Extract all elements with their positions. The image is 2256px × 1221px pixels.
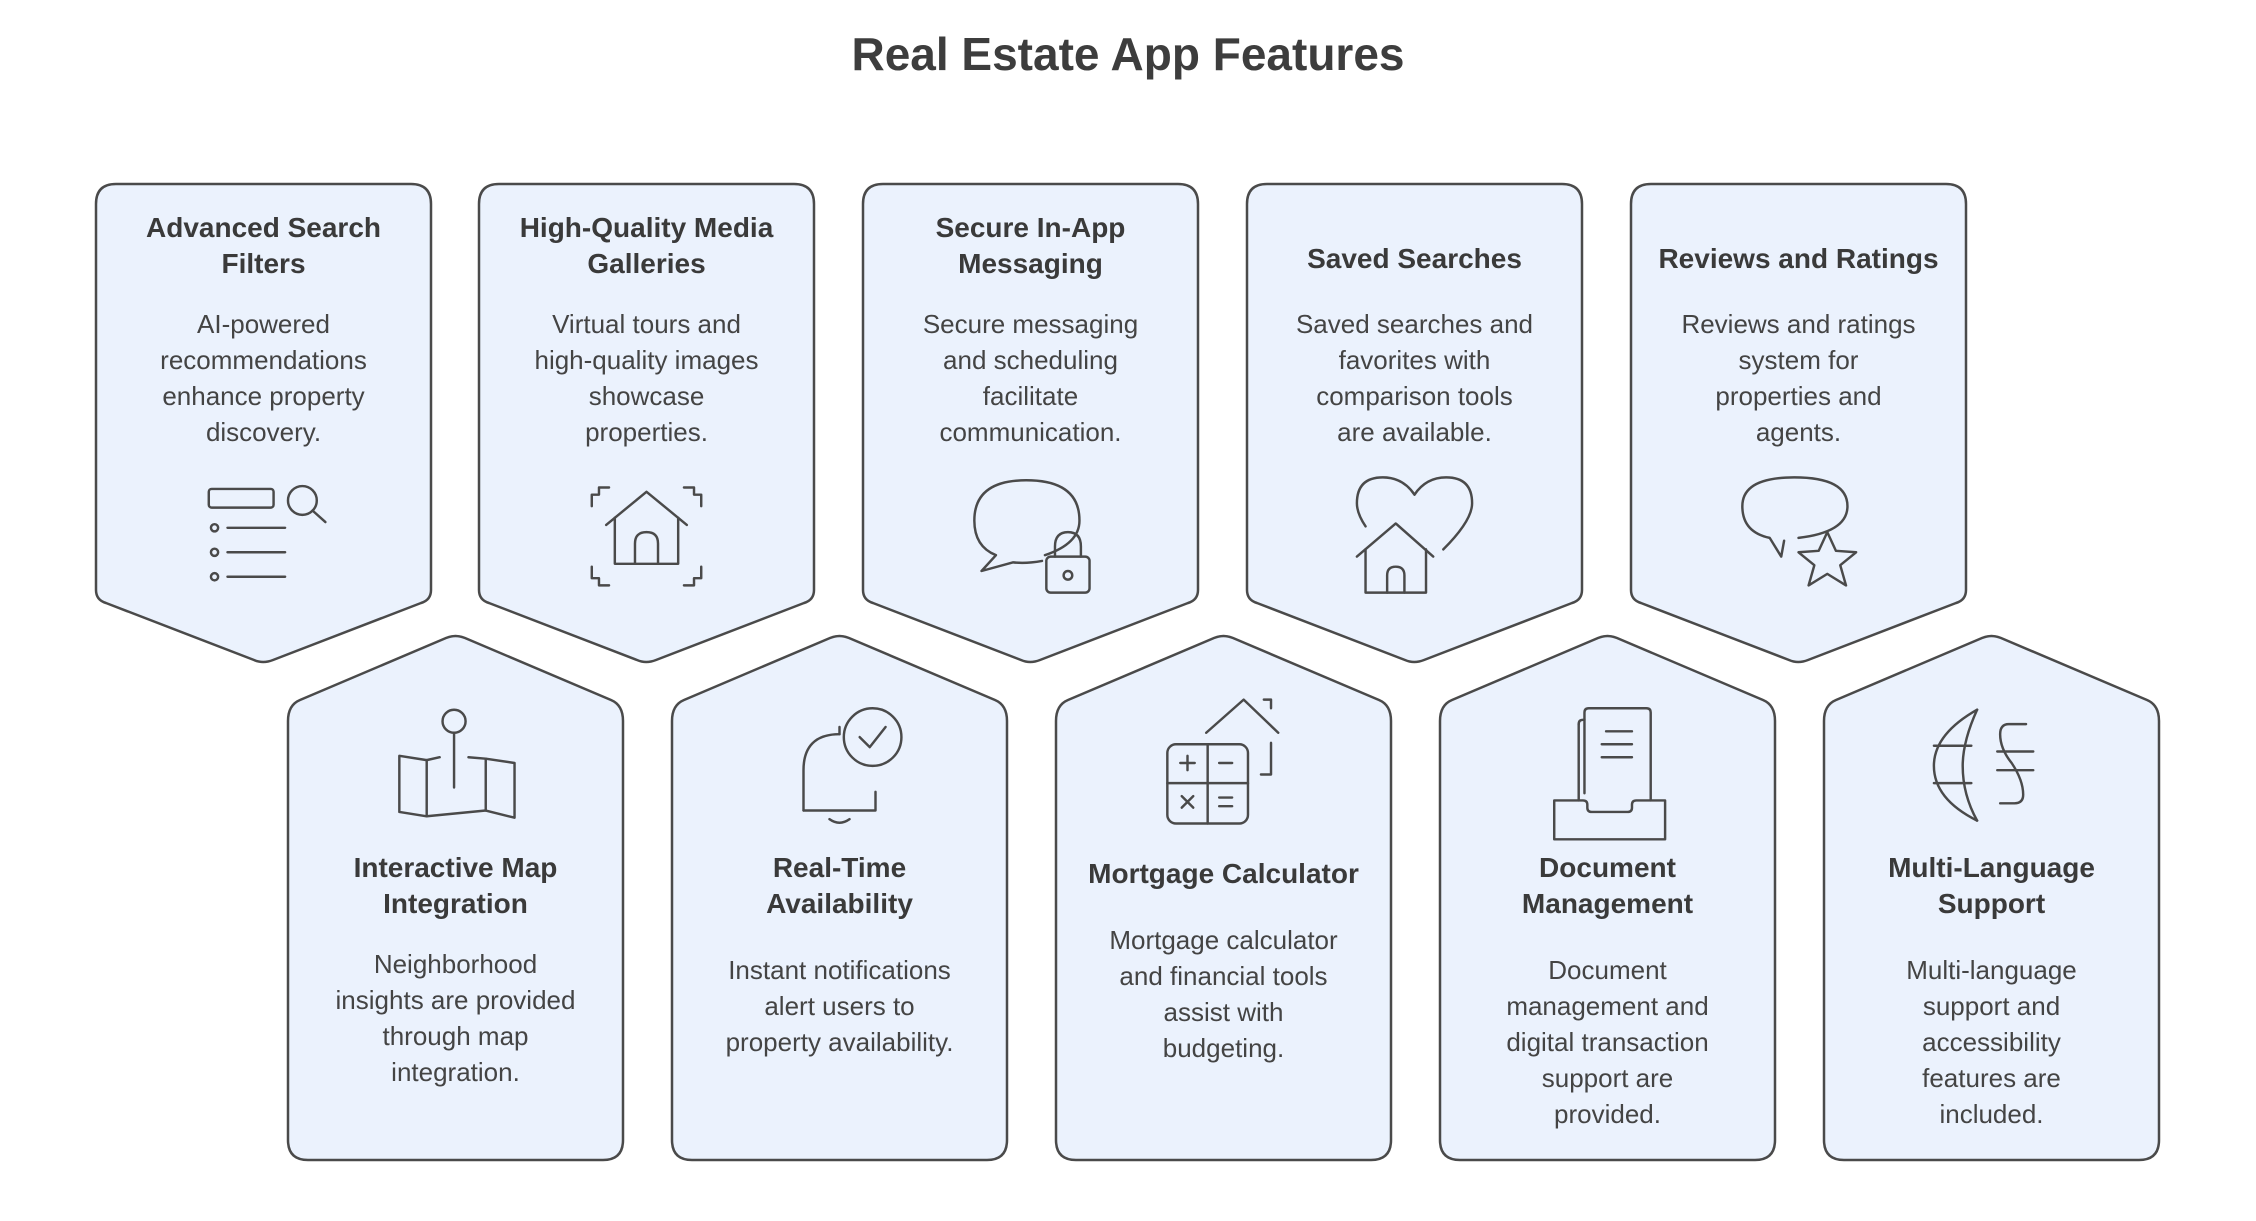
icon: language globe [1934,710,2033,821]
panel: Multi-Language Support: Support [1938,888,2045,919]
panel: Document Management: support are [1542,1063,1673,1093]
panel: Advanced Search Filters: recommendations [160,345,367,375]
panel: Secure In-App Messaging: facilitate [983,381,1078,411]
panel: Real-Time Availability: alert users to [764,991,915,1021]
panel: Secure In-App Messaging [863,184,1198,662]
panel: Mortgage Calculator: assist with [1164,997,1283,1027]
panel: Saved Searches: are available. [1337,417,1492,447]
panel: Advanced Search Filters: enhance property [162,381,365,411]
panel: Document Management: management and [1506,991,1709,1021]
panel: Reviews and Ratings: properties and [1715,381,1882,411]
panel: Saved Searches [1247,184,1582,662]
icon: map pin [399,710,515,818]
panel: Mortgage Calculator: budgeting. [1163,1033,1284,1063]
panel: Multi-Language Support: Multi-language [1906,955,2077,985]
panel: Saved Searches: Saved searches and [1296,309,1533,339]
panel: Reviews and Ratings: agents. [1756,417,1841,447]
panel: Multi-Language Support: accessibility [1922,1027,2061,1057]
icon: heart house [1357,477,1472,593]
panel: Interactive Map Integration [288,636,623,1160]
panel: Secure In-App Messaging: Secure In-App [936,212,1125,243]
panel: Real-Time Availability: Availability [766,888,913,919]
panel: Multi-Language Support: Multi-Language [1888,852,2095,883]
panel: Interactive Map Integration: integration. [391,1057,520,1087]
panel: Interactive Map Integration: through map [383,1021,528,1051]
icon: bell check [804,708,901,823]
panel: High-Quality Media Galleries: Galleries [587,248,706,279]
panel: High-Quality Media Galleries: High-Quality Media [520,212,774,243]
panel: Real-Time Availability: property availability. [726,1027,953,1057]
panel: High-Quality Media Galleries: properties. [585,417,708,447]
panel: Advanced Search Filters: Filters [221,248,306,279]
panel: High-Quality Media Galleries [479,184,814,662]
panel: Reviews and Ratings: system for [1739,345,1859,375]
panel: Document Management: provided. [1554,1099,1661,1129]
panel: High-Quality Media Galleries: high-quality images [534,345,759,375]
panel: Advanced Search Filters: Advanced Search [146,212,381,243]
panel: High-Quality Media Galleries: showcase [589,381,704,411]
icon: chat star [1742,477,1856,585]
panel: Secure In-App Messaging: Secure messaging [923,309,1138,339]
panel: Real-Time Availability: Instant notifications [728,955,951,985]
icon: document tray [1554,708,1665,839]
panel: Multi-Language Support: features are [1922,1063,2061,1093]
panel: Advanced Search Filters [96,184,431,662]
panel: Reviews and Ratings: Reviews and ratings [1681,309,1916,339]
panel: Document Management: digital transaction [1506,1027,1709,1057]
title: Real Estate App Features [851,28,1405,80]
panel: Real-Time Availability [672,636,1007,1160]
icon: house gallery [592,487,701,585]
icon: calculator house [1167,700,1278,823]
panel: Saved Searches: favorites with [1339,345,1490,375]
panel: Saved Searches: Saved Searches [1307,243,1522,274]
panel: Mortgage Calculator [1056,636,1391,1160]
panel: Secure In-App Messaging: Messaging [958,248,1103,279]
panel: Saved Searches: comparison tools [1316,381,1513,411]
panel: Interactive Map Integration: Neighborhood [374,949,537,979]
panel: Multi-Language Support [1824,636,2159,1160]
panel: Document Management [1440,636,1775,1160]
icon: chat lock [974,480,1090,593]
panel: Interactive Map Integration: Integration [383,888,528,919]
icon: search list [209,486,325,580]
panel: Document Management: Management [1522,888,1693,919]
panel: Reviews and Ratings [1631,184,1966,662]
panel: Advanced Search Filters: AI-powered [197,309,330,339]
panel: Real-Time Availability: Real-Time [773,852,906,883]
panel: Secure In-App Messaging: communication. [939,417,1122,447]
panel: Mortgage Calculator: Mortgage calculator [1109,925,1338,955]
panel: Mortgage Calculator: Mortgage Calculator [1088,858,1359,889]
panel: Multi-Language Support: support and [1923,991,2060,1021]
panel: Interactive Map Integration: Interactive Map [354,852,557,883]
panel: Reviews and Ratings: Reviews and Ratings [1658,243,1939,274]
panel: Mortgage Calculator: and financial tools [1119,961,1328,991]
panel: Interactive Map Integration: insights are provided [336,985,575,1015]
panel: High-Quality Media Galleries: Virtual tours and [552,309,741,339]
panel: Document Management: Document [1539,852,1676,883]
panel: Secure In-App Messaging: and scheduling [943,345,1118,375]
panel: Advanced Search Filters: discovery. [206,417,321,447]
panel: Document Management: Document [1548,955,1668,985]
panel: Multi-Language Support: included. [1939,1099,2044,1129]
